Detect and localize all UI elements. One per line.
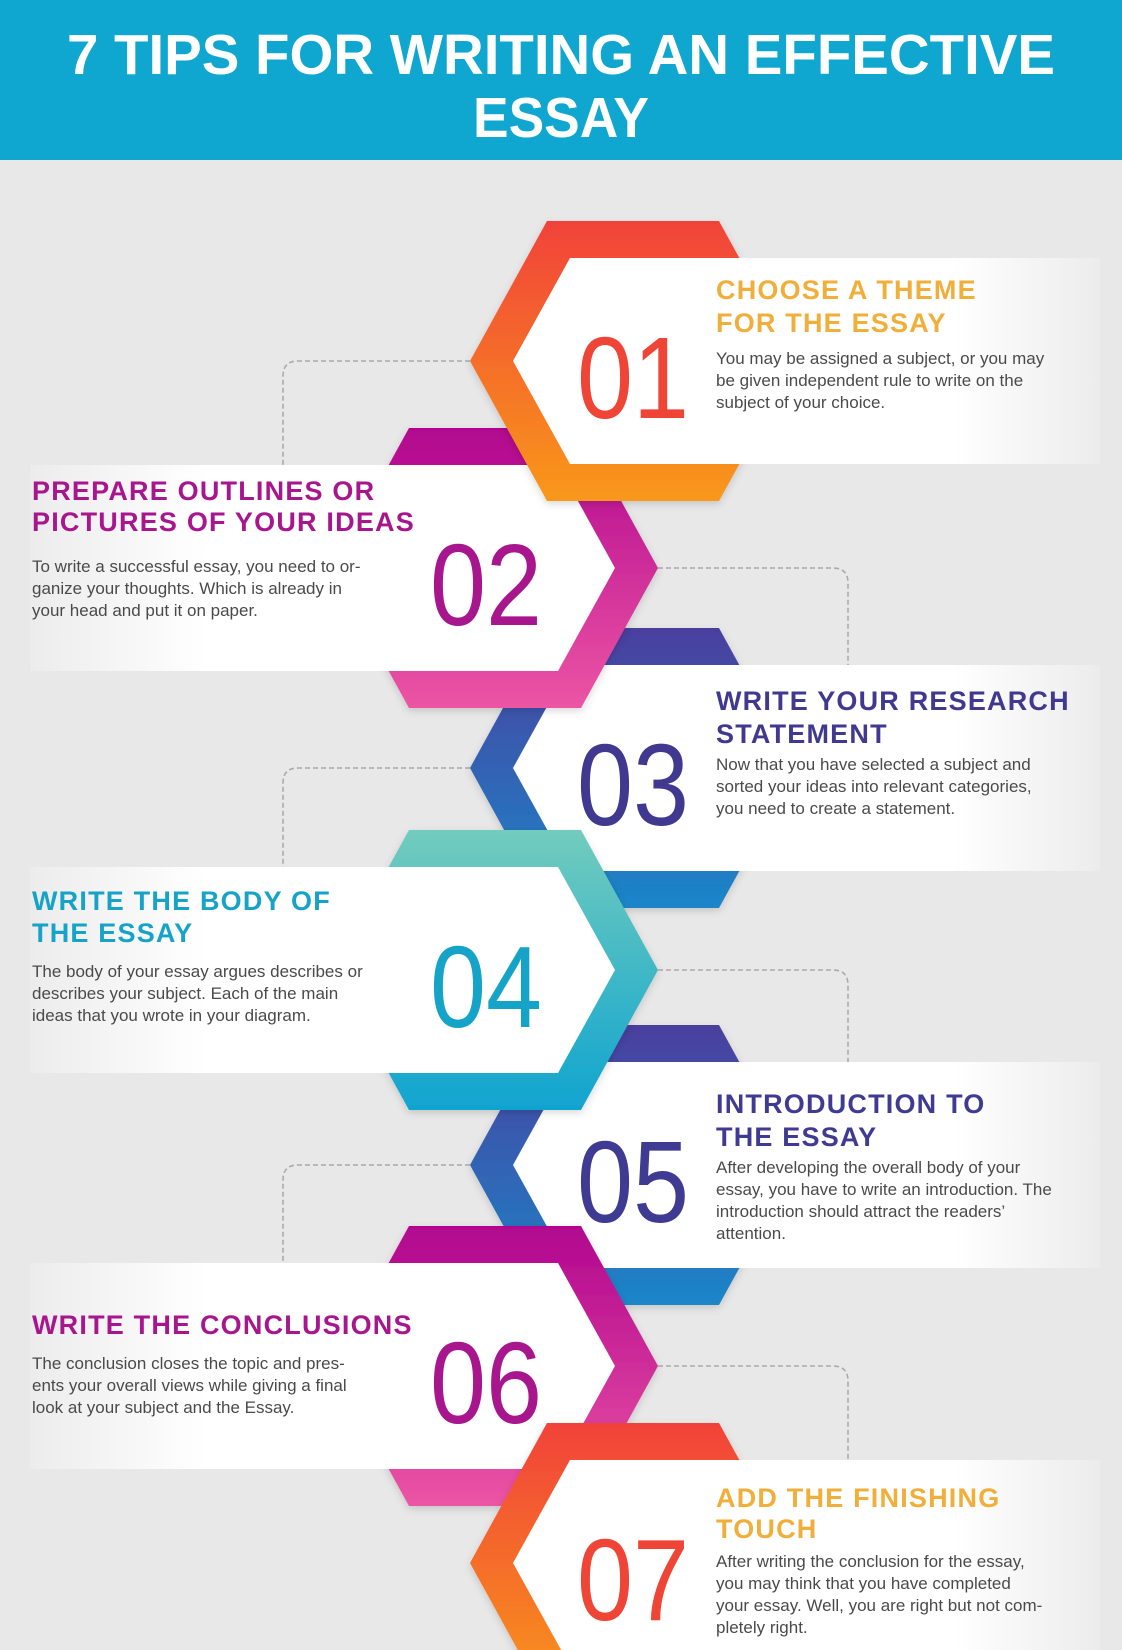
step 02: PICTURES OF YOUR IDEAS: [32, 507, 415, 537]
step 05: After developing the overall body of your: [716, 1158, 1021, 1177]
step 03: [470, 628, 1100, 908]
step 02: ganize your thoughts. Which is already in: [32, 579, 342, 598]
step 07: 07: [577, 1515, 689, 1645]
step 04: describes your subject. Each of the main: [32, 984, 338, 1003]
step 02: PREPARE OUTLINES OR: [32, 476, 375, 506]
step 07: TOUCH: [716, 1514, 818, 1544]
step 03: you need to create a statement.: [716, 799, 955, 818]
step 04: ideas that you wrote in your diagram.: [32, 1006, 311, 1025]
step 02: 02: [430, 520, 542, 650]
step 06: ents your overall views while giving a final: [32, 1376, 347, 1395]
step 01: CHOOSE A THEME: [716, 275, 977, 305]
step 06: The conclusion closes the topic and pres-: [32, 1354, 345, 1373]
step 04: 04: [430, 922, 542, 1052]
title banner: [0, 0, 1122, 160]
step 06: [30, 1226, 658, 1506]
step 07: [470, 1423, 1100, 1650]
step 01: 01: [577, 313, 689, 443]
title banner: ESSAY: [473, 86, 649, 150]
step 07: ADD THE FINISHING: [716, 1483, 1000, 1513]
step 06: WRITE THE CONCLUSIONS: [32, 1310, 413, 1340]
step 05: 05: [577, 1117, 689, 1247]
step 01: FOR THE ESSAY: [716, 308, 947, 338]
step 03: 03: [577, 720, 689, 850]
step 01: You may be assigned a subject, or you may: [716, 349, 1045, 368]
step 06: 06: [430, 1318, 542, 1448]
step 07: your essay. Well, you are right but not com-: [716, 1596, 1042, 1615]
dashed connectors: [283, 361, 848, 1460]
step 03: WRITE YOUR RESEARCH: [716, 686, 1070, 716]
step 04: The body of your essay argues describes or: [32, 962, 363, 981]
step 03: STATEMENT: [716, 719, 888, 749]
step 02: To write a successful essay, you need to or-: [32, 557, 361, 576]
step 01: be given independent rule to write on the: [716, 371, 1023, 390]
step 03: sorted your ideas into relevant categories,: [716, 777, 1032, 796]
step 04: [30, 830, 658, 1110]
step 04: WRITE THE BODY OF: [32, 886, 331, 916]
step 05: THE ESSAY: [716, 1122, 877, 1152]
step 01: subject of your choice.: [716, 393, 885, 412]
step 07: pletely right.: [716, 1618, 808, 1637]
step 02: [30, 428, 658, 708]
step 02: your head and put it on paper.: [32, 601, 258, 620]
step 07: After writing the conclusion for the essay,: [716, 1552, 1025, 1571]
step 07: you may think that you have completed: [716, 1574, 1011, 1593]
step 05: essay, you have to write an introduction. The: [716, 1180, 1052, 1199]
step 05: [470, 1025, 1100, 1305]
step 03: Now that you have selected a subject and: [716, 755, 1031, 774]
step 05: introduction should attract the readers’: [716, 1202, 1005, 1221]
step 05: INTRODUCTION TO: [716, 1089, 986, 1119]
title banner: 7 TIPS FOR WRITING AN EFFECTIVE: [67, 23, 1055, 87]
step 01: [470, 221, 1100, 501]
step 06: look at your subject and the Essay.: [32, 1398, 294, 1417]
step 04: THE ESSAY: [32, 918, 193, 948]
step 05: attention.: [716, 1224, 786, 1243]
